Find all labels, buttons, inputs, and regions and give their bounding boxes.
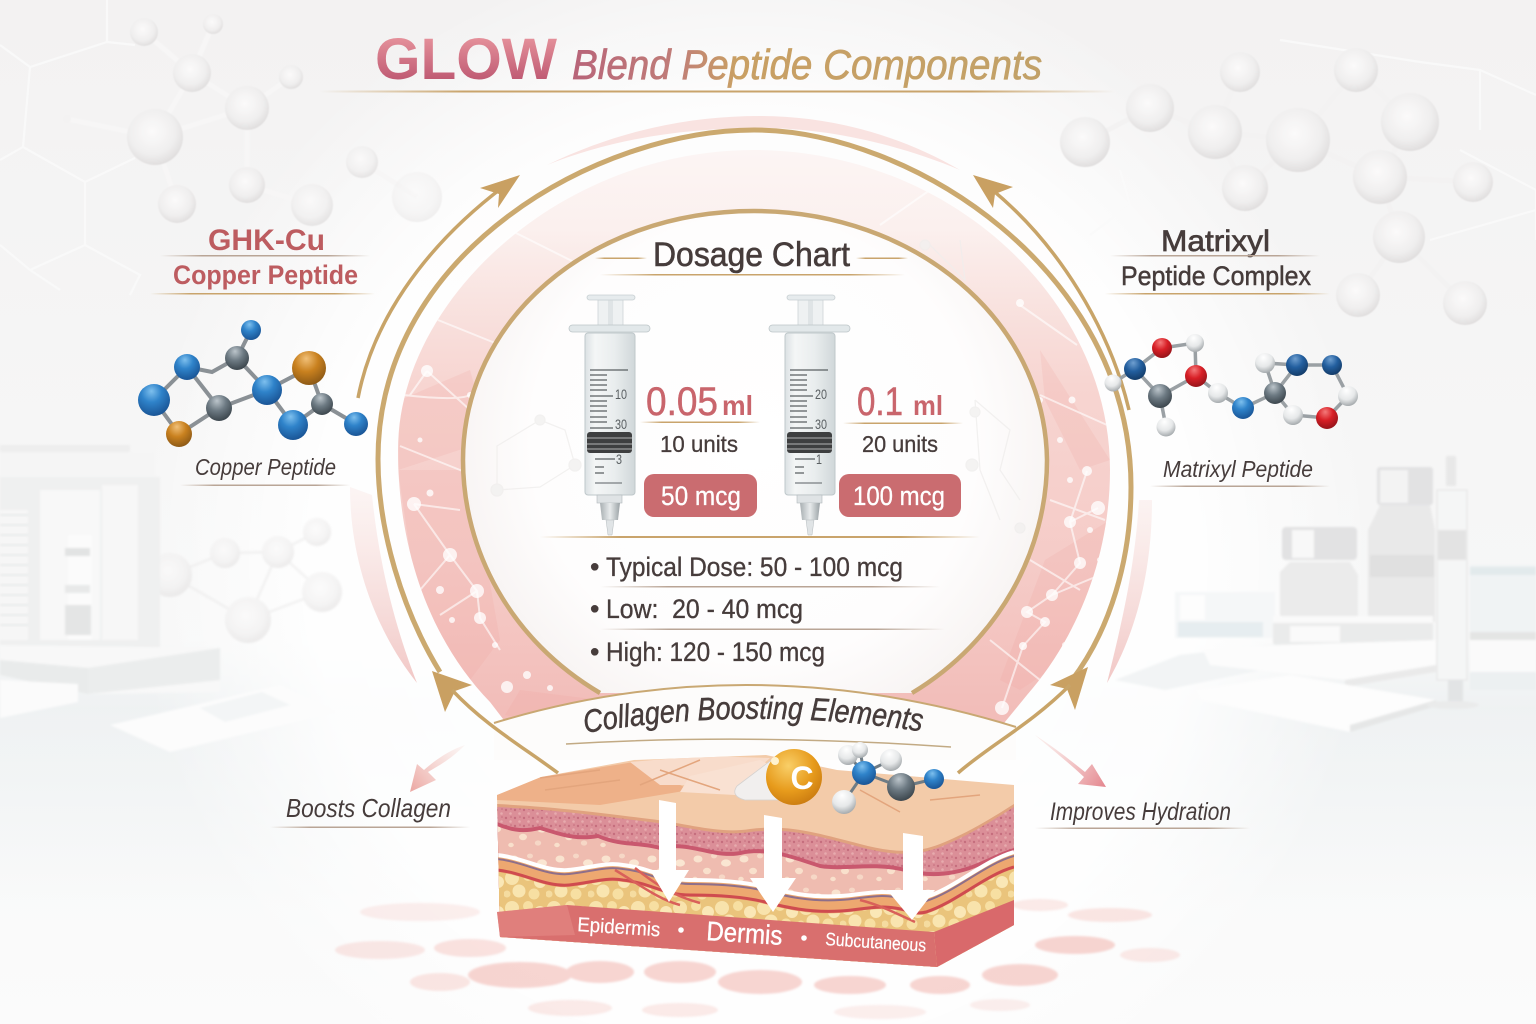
label: Matrixyl Peptide Complex: Peptide Complex [1121, 261, 1311, 291]
dose list: High: 120 - 150 mcg [606, 637, 825, 667]
skin cross-section block [497, 742, 1014, 967]
decorative pink floor blotches [335, 899, 1180, 1019]
dose: 0.1 ml: 20 units [862, 431, 938, 457]
decorative pale arcs [350, 116, 1152, 683]
icon: matrixyl molecule [1104, 334, 1358, 436]
caption: Matrixyl Peptide: Matrixyl Peptide [1163, 456, 1313, 482]
arrow: penetration 2 [750, 815, 796, 912]
arrow: boosts collagen [410, 745, 465, 792]
icon: copper peptide molecule [138, 320, 368, 447]
label: GHK-Cu Copper Peptide: GHK-Cu [208, 224, 325, 257]
skin surface [497, 755, 1014, 851]
divider above dose list [540, 536, 980, 538]
dose: 0.05 ml: ml [722, 390, 753, 421]
center white panel [463, 211, 1047, 693]
banner: Collagen Boosting Elements [494, 684, 1016, 748]
syringe: 20 units: 1 [816, 451, 822, 467]
dose list: • [590, 552, 599, 582]
faint molecule watermark in center [491, 240, 1025, 533]
background: hexagon grid top left [0, 0, 1536, 295]
title: GLOW [375, 27, 557, 92]
syringe: 10 units: 10 [615, 386, 627, 402]
label strip [497, 900, 1014, 967]
gold ring: inner [463, 211, 1047, 693]
title [320, 27, 1115, 92]
dose list: Low: 20 - 40 mcg [606, 594, 803, 624]
arrow: top left [358, 175, 520, 398]
dose: 0.05 ml [640, 380, 760, 517]
dose: 0.1 ml: 100 mcg [853, 481, 945, 511]
label strip: Epidermis [577, 914, 661, 941]
arrow: improves hydration [1035, 735, 1106, 787]
caption: Boosts Collagen: Boosts Collagen [286, 793, 451, 823]
gold ring: outer [378, 130, 1131, 680]
label: GHK-Cu Copper Peptide: Copper Peptide [173, 260, 358, 290]
arrow: lower right head [1050, 667, 1088, 710]
heading: Dosage Chart: Dosage Chart [653, 236, 851, 274]
arrow: penetration 1 [650, 800, 689, 902]
label strip: Dermis [706, 916, 783, 951]
dose list [590, 552, 945, 667]
background molecule: top right [1060, 48, 1493, 325]
background molecule: top left [63, 14, 442, 226]
banner: Collagen Boosting Elements: Collagen Boosting Elements [584, 695, 924, 732]
icon: vitamin C capsule: C [790, 760, 814, 796]
background: right lab equipment [1115, 456, 1536, 732]
caption: Copper Peptide: Copper Peptide [195, 454, 336, 480]
dose list: • [590, 637, 599, 667]
caption: Improves Hydration: Improves Hydration [1050, 798, 1231, 826]
syringe: 20 units: 20 [815, 386, 827, 402]
dose: 0.1 ml: 0.1 [857, 380, 903, 424]
label strip: Subcutaneous [825, 929, 927, 956]
panel: skin texture ring [398, 150, 1110, 728]
background: left lab equipment [0, 445, 337, 752]
icon: molecule on skin [832, 742, 944, 814]
syringe: 20 units: 30 [815, 416, 827, 432]
label: Matrixyl Peptide Complex: Matrixyl [1161, 225, 1270, 258]
title: Blend Peptide Components [572, 41, 1042, 88]
syringe: 10 units [569, 295, 650, 535]
arrow: top right [973, 175, 1129, 410]
dose: 0.05 ml: 10 units [660, 431, 738, 457]
icon: vitamin C capsule [735, 749, 822, 805]
dose list: • [590, 594, 599, 624]
arrow: lower shafts [452, 685, 1070, 773]
arrow: lower left head [432, 671, 472, 712]
dose: 0.05 ml: 0.05 [646, 380, 718, 424]
syringe: 20 units [769, 295, 850, 535]
dose list: Typical Dose: 50 - 100 mcg [606, 552, 903, 582]
label: Matrixyl Peptide Complex [1105, 225, 1330, 294]
syringe: 10 units: 30 [615, 416, 627, 432]
dose: 0.1 ml [839, 380, 963, 517]
background molecule: lower left [148, 518, 342, 643]
label: GHK-Cu Copper Peptide [150, 224, 375, 294]
syringe: 10 units: 3 [616, 451, 622, 467]
dose: 0.1 ml: ml [913, 390, 943, 421]
arrow: penetration 3 [887, 833, 935, 920]
dose: 0.05 ml: 50 mcg [661, 481, 741, 511]
